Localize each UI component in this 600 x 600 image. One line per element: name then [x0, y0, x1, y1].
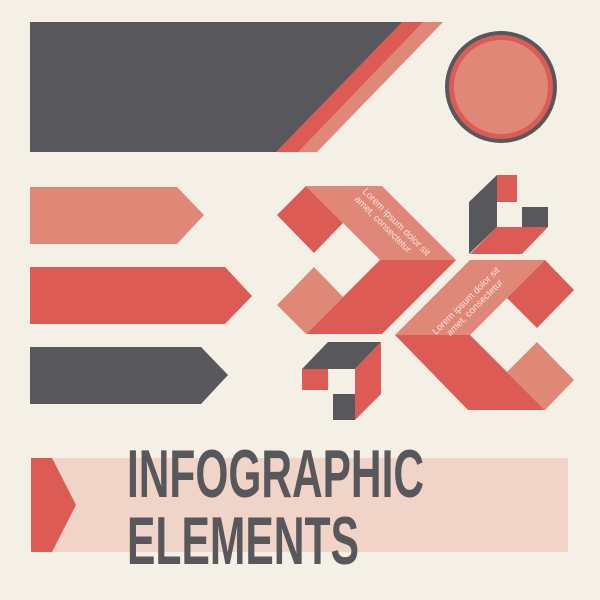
ribbon shape: left	[277, 186, 456, 334]
ribbon shape: right	[395, 260, 574, 410]
title banner	[31, 436, 568, 579]
text: left ribbon caption: amet, consectetur	[352, 194, 413, 255]
title text: INFOGRAPHIC	[127, 436, 424, 512]
text: right ribbon caption: amet, consectetur	[444, 277, 506, 339]
arrow: red	[30, 267, 252, 324]
title banner: ELEMENTS	[127, 503, 359, 579]
icon: circle badge	[445, 31, 557, 143]
arrow: light	[30, 187, 204, 244]
text: left ribbon caption: Lorem ipsum dolor sit	[360, 186, 432, 259]
banner: dark header with stripes	[30, 22, 443, 152]
arrow: dark	[30, 347, 228, 404]
icon: bottom-left cube	[302, 342, 381, 420]
icon: top-right cube	[469, 175, 548, 254]
text: right ribbon caption: Lorem ipsum dolor sit	[430, 265, 503, 337]
